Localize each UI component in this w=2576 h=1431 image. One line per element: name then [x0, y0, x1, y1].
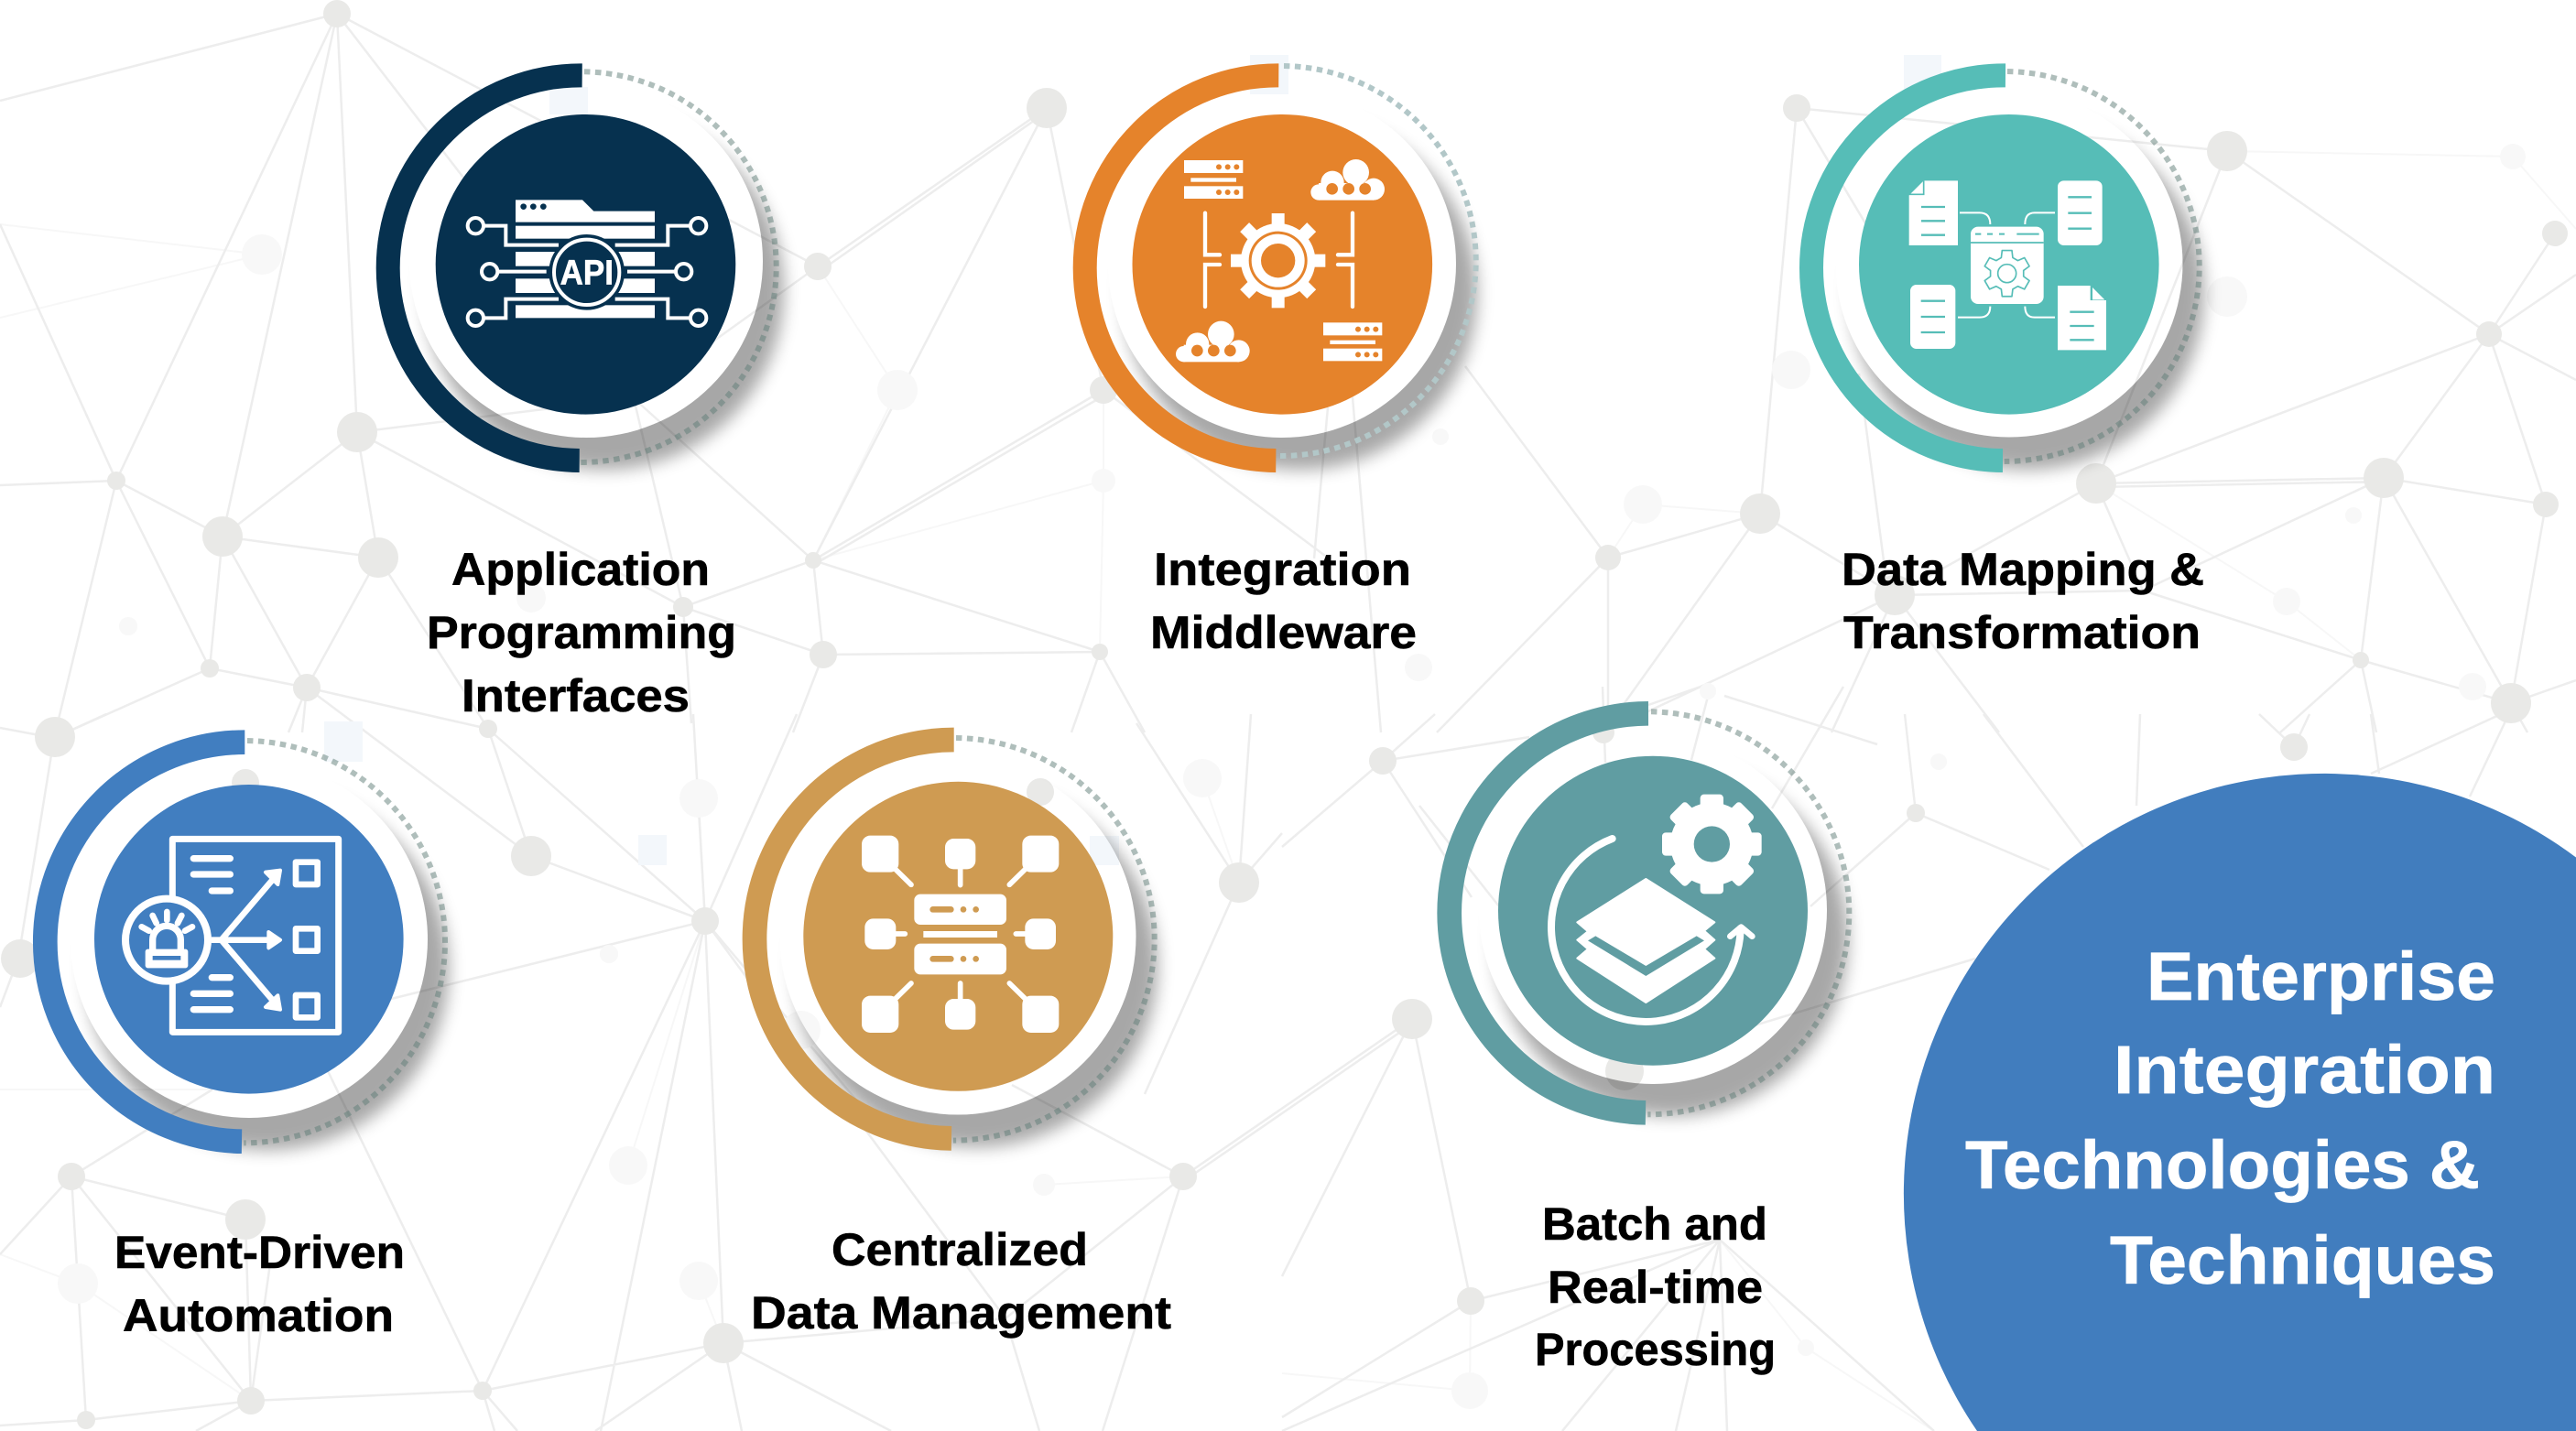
panel: Application Programming Interfaces: [388, 71, 784, 721]
coloured arc: [755, 740, 954, 1138]
label: Data Management: [751, 1287, 1171, 1339]
dotted arc: [2005, 71, 2200, 461]
shadow crescent: [1851, 116, 2204, 470]
panel: Centralized Data Management: [751, 738, 1171, 1339]
label: [1842, 544, 2204, 658]
inner circle: [1132, 114, 1432, 415]
label: Application: [451, 544, 710, 595]
label: Programming: [427, 607, 736, 658]
dotted arc: [1280, 66, 1476, 456]
label: Batch and: [1542, 1198, 1767, 1250]
title: Enterprise: [2147, 938, 2495, 1014]
icon: alarm triggering actions: [125, 839, 339, 1032]
label: Real-time: [1548, 1262, 1763, 1313]
dotted arc: [953, 738, 1155, 1141]
label: [114, 1227, 405, 1341]
dotted arc: [244, 741, 445, 1143]
title: Techniques: [2110, 1222, 2495, 1298]
shadow crescent: [86, 787, 449, 1150]
title: Technologies &: [1965, 1127, 2480, 1203]
title circle: [1904, 774, 2576, 1431]
icon: documents mapped to gear window: [1909, 180, 2106, 350]
coloured arc: [1085, 75, 1278, 461]
shadow crescent: [795, 785, 1158, 1147]
label: [1150, 544, 1417, 658]
label: Middleware: [1150, 607, 1417, 658]
title panel: [1904, 774, 2576, 1431]
icon: central server with nodes: [862, 836, 1059, 1033]
inner circle: [436, 114, 735, 415]
panel: Data Mapping & Transformation: [1811, 71, 2204, 658]
label: Interfaces: [462, 670, 690, 721]
dotted arc: [1647, 711, 1849, 1114]
inner circle: [803, 782, 1113, 1091]
coloured arc: [45, 743, 245, 1142]
label: Centralized: [831, 1224, 1088, 1275]
icon: API folder circuit: [468, 200, 706, 326]
panel: Event-Driven Automation: [45, 741, 449, 1341]
coloured arc: [1450, 713, 1648, 1112]
icon: API folder circuit: API: [560, 254, 614, 292]
label: [1535, 1198, 1776, 1375]
shadow crescent: [1124, 116, 1477, 470]
inner circle: [1859, 114, 2159, 415]
shadow crescent: [425, 111, 784, 470]
label: Transformation: [1843, 607, 2201, 658]
title: Integration: [2114, 1032, 2495, 1108]
panel: Integration Middleware: [1085, 66, 1477, 658]
dotted arc: [581, 71, 777, 462]
label: Data Mapping &: [1842, 544, 2204, 595]
title: [1965, 938, 2495, 1298]
label: [751, 1224, 1171, 1339]
inner circle: [94, 785, 404, 1094]
label: Integration: [1154, 544, 1411, 595]
label: Automation: [123, 1290, 394, 1341]
label: [427, 544, 736, 721]
label: Event-Driven: [114, 1227, 405, 1278]
icon: gear with servers and clouds: [1176, 159, 1385, 362]
inner circle: [1498, 756, 1808, 1066]
shadow crescent: [1495, 763, 1848, 1116]
panel: Batch and Real-time Processing: [1450, 711, 1849, 1375]
icon: layers, gear and cycle arrow: [1551, 795, 1762, 1022]
label: Processing: [1535, 1324, 1776, 1375]
coloured arc: [1811, 75, 2005, 461]
coloured arc: [388, 75, 582, 461]
